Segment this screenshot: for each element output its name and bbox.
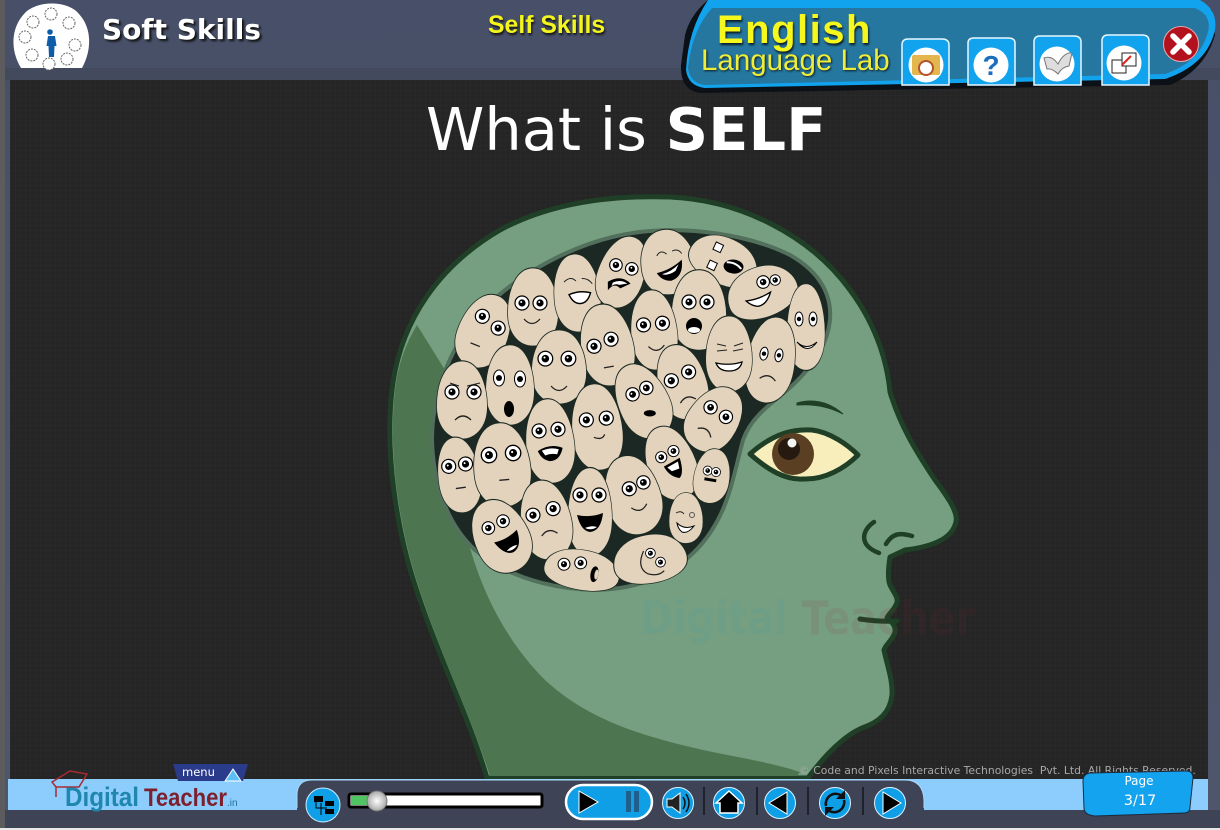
shaded back of head and neck: [393, 325, 800, 776]
page indicator: Page: [1124, 774, 1154, 788]
text: English: English: [717, 8, 872, 52]
text: Language Lab: Language Lab: [701, 44, 890, 77]
heading: Soft Skills: Soft Skills: [102, 13, 261, 46]
face 2: [508, 268, 558, 346]
face 20: [568, 381, 626, 473]
button: home: [714, 788, 744, 818]
logo: soft skills circle: [13, 4, 89, 70]
top right panel: English Language Lab: [681, 0, 1215, 93]
face 32: [609, 529, 691, 589]
face 22: [433, 434, 485, 516]
logo: Digital Teacher: Digital: [65, 782, 139, 812]
face 31: [541, 544, 623, 596]
tab: help: [968, 38, 1015, 85]
face 1: [446, 286, 522, 376]
icon: eye: [750, 430, 858, 479]
face 5: [635, 225, 701, 299]
menu tab: menu: [182, 765, 215, 779]
face 18: [603, 355, 683, 447]
face 6: [681, 225, 767, 297]
face 3: [550, 252, 604, 334]
face 26: [596, 449, 670, 541]
face 14: [486, 345, 534, 425]
face 10: [671, 270, 727, 350]
page indicator: 3/17: [1124, 793, 1156, 809]
heading: Self Skills: Self Skills: [488, 12, 605, 39]
eyebrow: [797, 401, 843, 414]
nose lines: [864, 522, 912, 553]
title: What is SELF: What is SELF: [426, 95, 826, 164]
face 25: [689, 446, 735, 506]
page indicator: [1083, 771, 1193, 816]
face 17: [649, 339, 715, 425]
face 12: [574, 300, 640, 390]
brain cavity: [432, 230, 830, 590]
button: topic tree: [306, 788, 340, 822]
bottom blue bar: [8, 779, 1208, 810]
faces: [433, 225, 825, 596]
face 15: [437, 361, 487, 439]
face 9: [739, 313, 803, 407]
face 29: [460, 490, 542, 582]
logo: Digital Teacher: Teacher: [144, 784, 227, 812]
tab: book: [1034, 36, 1081, 85]
head illustration: [390, 197, 956, 778]
button: back: [764, 788, 796, 818]
tab: calendar clock: [902, 39, 949, 85]
face 13: [531, 330, 587, 404]
face 27: [568, 467, 612, 557]
logo: Digital Teacher: .in: [227, 798, 238, 809]
copyright: © Code and Pixels Interactive Technologies Pvt. Ltd. All Rights Reserved.: [799, 764, 1196, 777]
face 11: [627, 288, 681, 372]
button: close: [1164, 26, 1198, 62]
button: forward: [874, 788, 906, 818]
mouth line: [860, 619, 897, 621]
progress slider: [349, 791, 542, 811]
face 23: [470, 420, 534, 510]
button: volume: [662, 788, 694, 818]
face 21: [522, 397, 578, 485]
tab: help: ?: [982, 50, 1000, 81]
watermark: Digital Teacher: Digital Teacher: [640, 591, 975, 645]
bottom dark strip: [5, 810, 1220, 828]
logo: Digital Teacher: [52, 771, 238, 812]
control dock: [297, 780, 924, 828]
face 16: [706, 316, 752, 392]
face 8: [787, 284, 825, 370]
face 28: [514, 476, 578, 564]
menu tab: [173, 764, 248, 781]
face 19: [673, 376, 755, 462]
head silhouette: [390, 197, 956, 778]
face 4: [587, 229, 657, 315]
face 7: [719, 256, 805, 328]
play pause control: [566, 785, 652, 819]
tab: window resize: [1102, 35, 1149, 85]
button: refresh: [820, 788, 850, 818]
face 30: [669, 493, 703, 543]
face 24: [635, 419, 707, 507]
